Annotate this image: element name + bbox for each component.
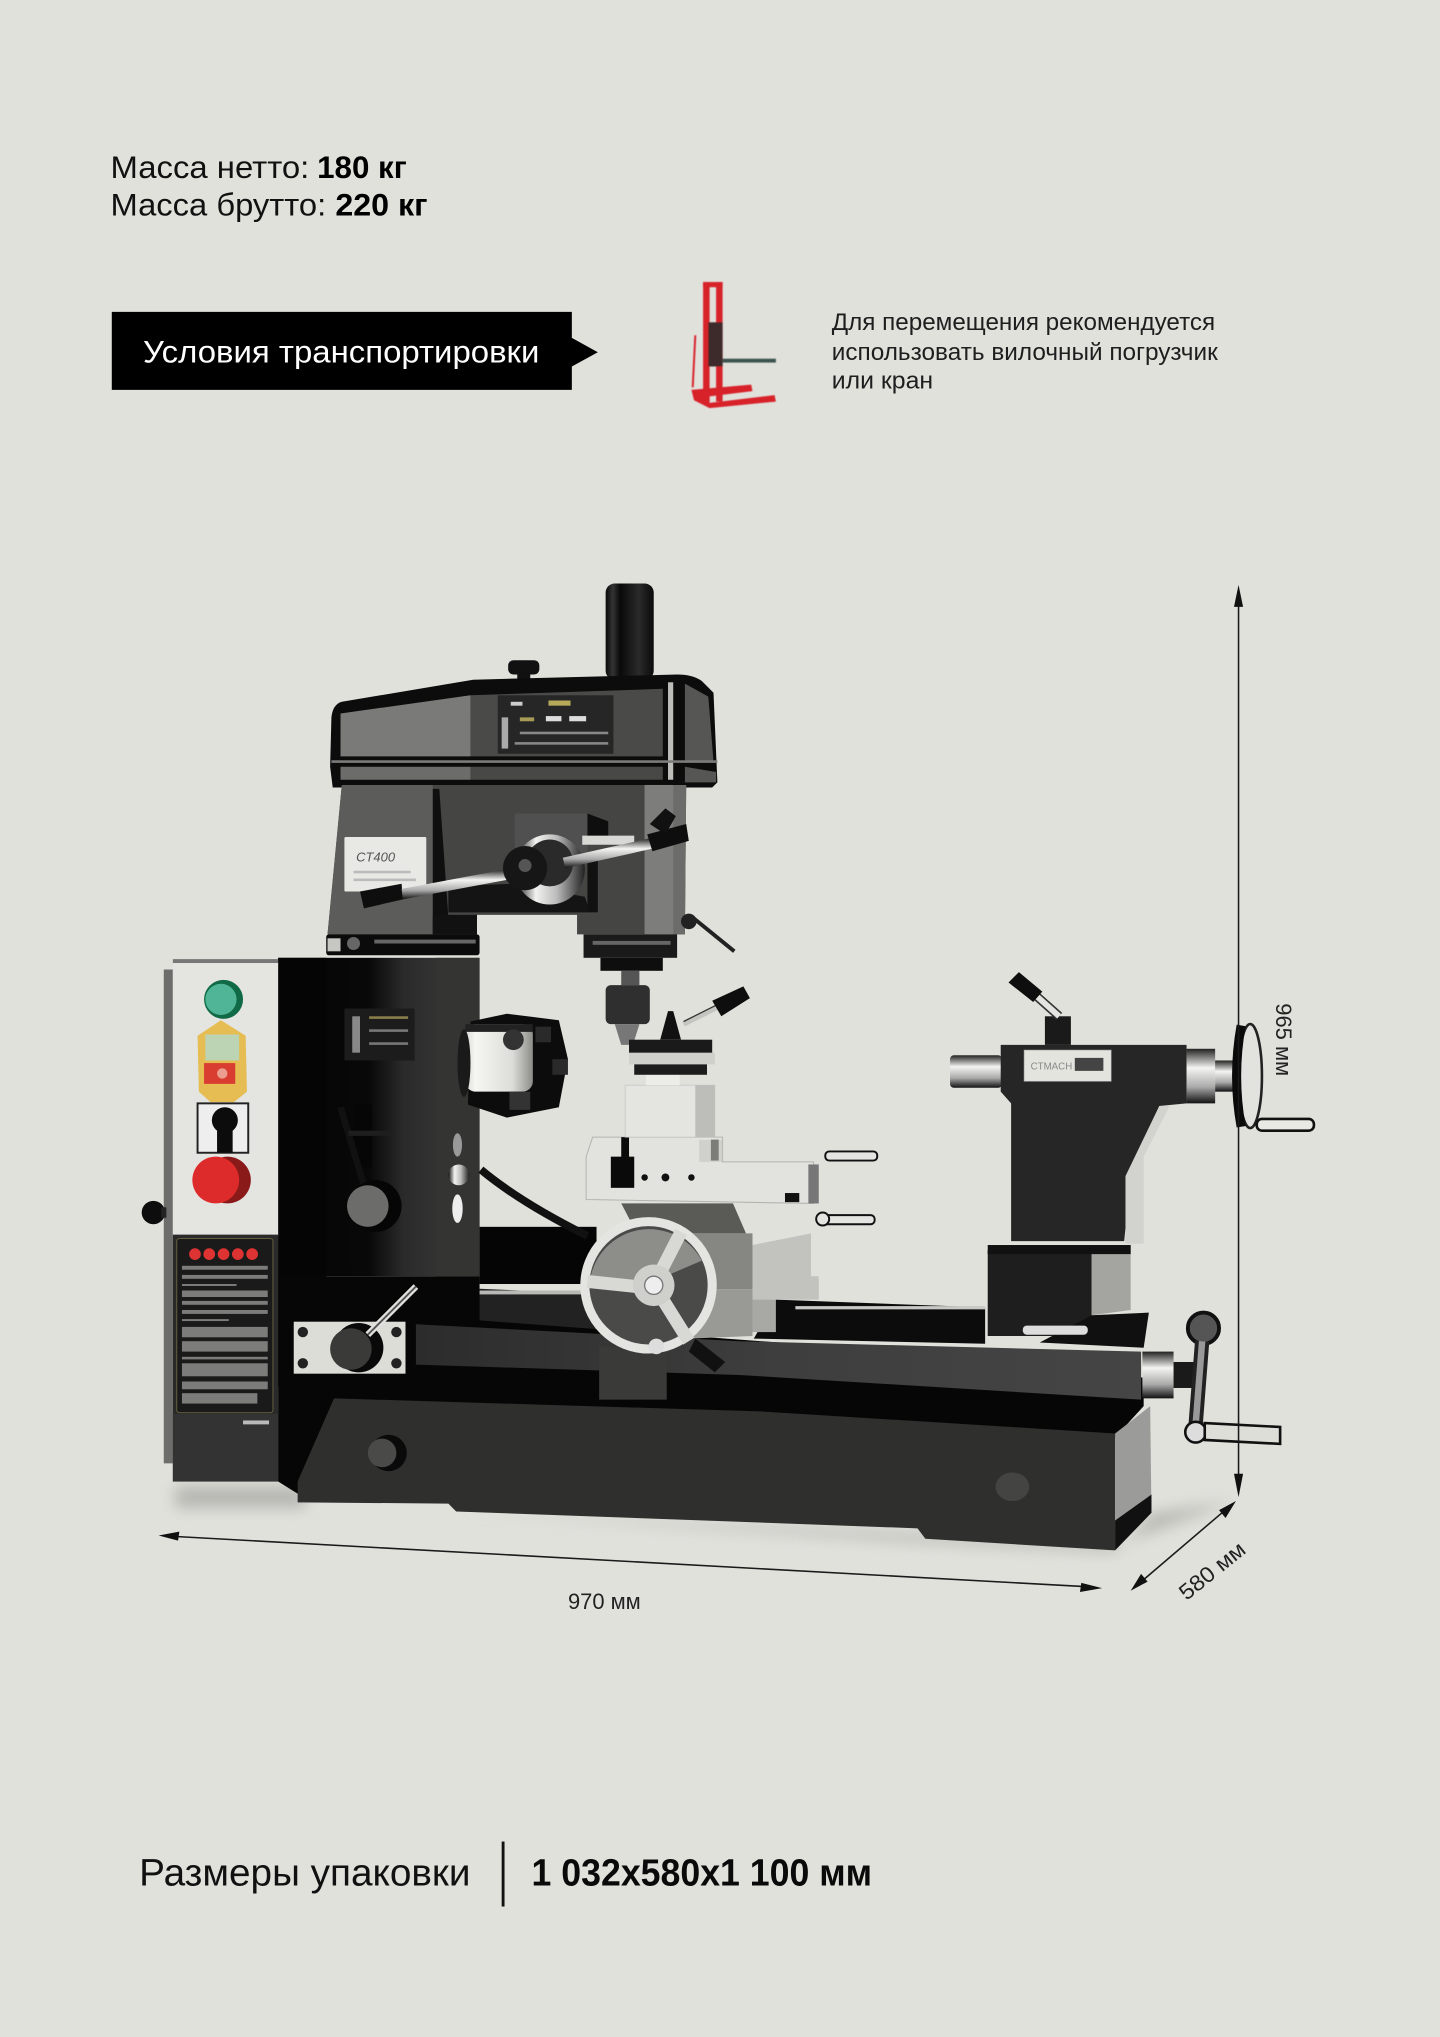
handwheel (585, 1222, 725, 1372)
tailstock (950, 972, 1314, 1348)
mass text block (110, 149, 428, 223)
package dimensions: 1 032x580x1 100 мм (532, 1852, 872, 1894)
spindle and drill chuck (584, 914, 734, 1045)
tailstock label (1024, 1050, 1111, 1081)
mass text block: Масса нетто: (110, 149, 309, 185)
transport recommendation text: или кран (832, 368, 933, 395)
metalworking machine (142, 584, 1314, 1550)
tailstock handwheel (1187, 1024, 1314, 1131)
tailstock label: CTMACH (1031, 1062, 1072, 1073)
lower panel with warning plate (173, 1235, 278, 1482)
column indicators (448, 1133, 469, 1223)
control panel (142, 959, 278, 1482)
tool post block (625, 986, 750, 1137)
transport recommendation text: использовать вилочный погрузчик (832, 339, 1218, 366)
lathe bed rear rail (416, 1227, 985, 1344)
package dimensions: Размеры упаковки (139, 1852, 470, 1894)
head housing (330, 674, 717, 788)
transport conditions banner: Условия транспортировки (143, 335, 539, 370)
CT400 model plate (344, 837, 426, 892)
carriage and cross slide (586, 986, 877, 1400)
dimension arrow: width (159, 1532, 1102, 1592)
column info plate (344, 1008, 415, 1060)
dimension arrow: height (1234, 585, 1243, 1497)
mass text block: Масса брутто: (110, 187, 326, 223)
column body (278, 958, 480, 1387)
dimension arrow: depth (1131, 1501, 1236, 1591)
bed front panel (416, 1324, 1141, 1400)
transport recommendation text (832, 309, 1218, 395)
CT400 model plate: CT400 (356, 850, 396, 865)
leadscrew handle plate (294, 1287, 416, 1374)
corrugated cable (481, 1170, 587, 1236)
cross slide handles (816, 1151, 877, 1226)
quill cylinder (606, 584, 654, 680)
red emergency stop (192, 1157, 251, 1203)
lathe base (278, 1276, 1151, 1550)
feed handle with hub (360, 808, 689, 908)
lathe chuck (457, 1014, 568, 1118)
transport recommendation text: Для перемещения рекомендуется (832, 309, 1215, 336)
package dimensions (139, 1842, 872, 1907)
rotary selector switch (198, 1103, 248, 1153)
machine shadow (175, 1487, 1235, 1552)
milling head body (328, 785, 686, 934)
mass text block: 180 кг (317, 149, 407, 185)
yellow start stop switch (198, 1020, 247, 1102)
side knob (142, 1201, 166, 1224)
leadscrew crank (1142, 1313, 1280, 1444)
top knob (508, 660, 539, 681)
head collar ring (326, 934, 480, 955)
icon: red forklift (691, 282, 776, 408)
depth label: 580 мм (1174, 1536, 1250, 1605)
tailstock quill (950, 1055, 1002, 1088)
gearbox speed plate (498, 695, 613, 754)
transport conditions banner (112, 312, 598, 390)
tailstock clamp lever (1009, 972, 1071, 1045)
column lever (341, 1105, 402, 1232)
compound slide table (586, 1137, 819, 1203)
width label: 970 мм (568, 1589, 641, 1614)
base bolts (368, 1435, 1029, 1501)
cross slide blocks (621, 1203, 819, 1339)
mass text block: 220 кг (335, 187, 428, 223)
green indicator lamp (204, 980, 243, 1019)
height label: 965 мм (1271, 1003, 1296, 1076)
